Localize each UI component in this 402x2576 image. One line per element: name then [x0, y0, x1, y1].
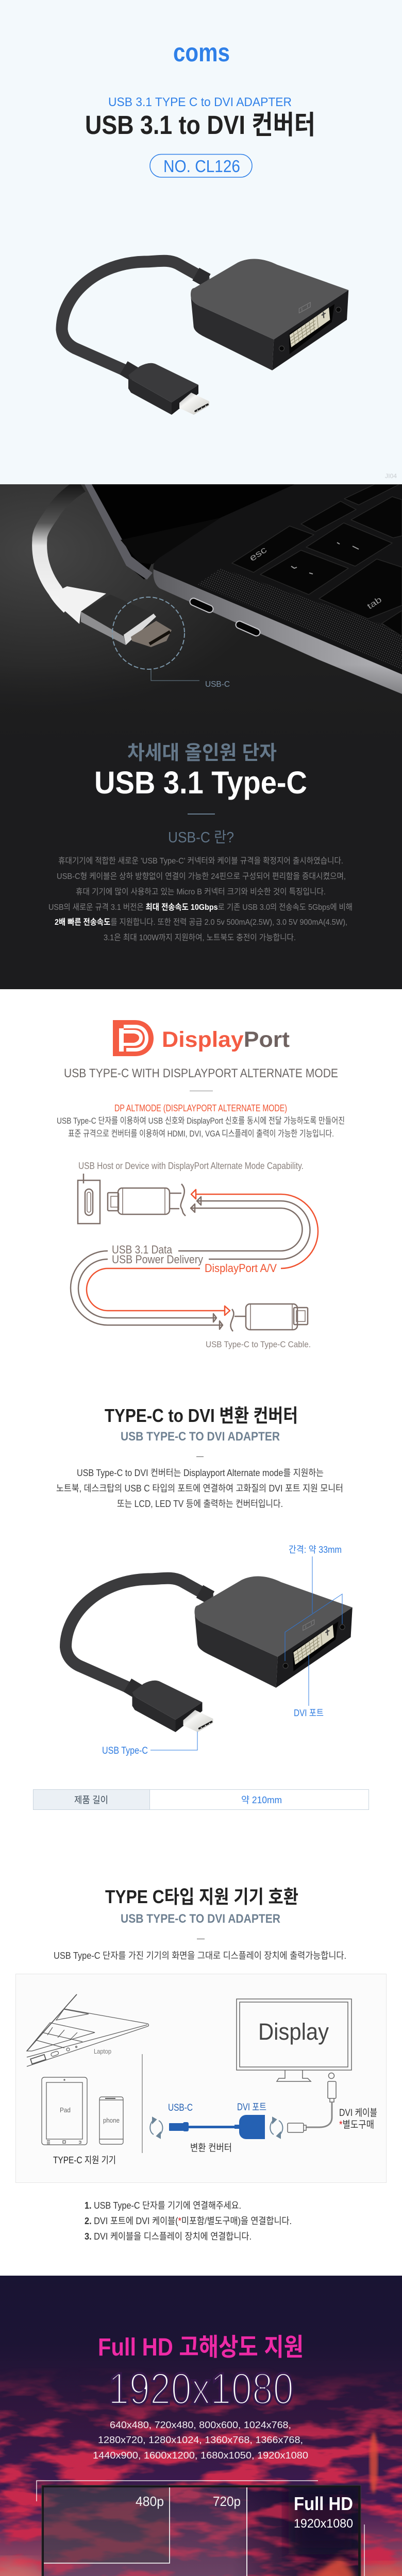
label: 1920x1080: 1920x1080	[294, 2517, 353, 2531]
heading: Full HD: Full HD 고해상도 지원	[98, 2334, 304, 2361]
icon: phone	[99, 2097, 123, 2144]
text block: converter description	[56, 1468, 343, 1509]
icon: connect arrows left	[150, 2117, 163, 2138]
text block: supported resolutions: 1280x720, 1280x1024, 1360x768, 1366x768,	[98, 2435, 303, 2445]
icon: blue converter	[169, 2115, 265, 2139]
label: Type-C devices: TYPE-C 지원 기기	[53, 2155, 116, 2165]
subheading: adapter: USB TYPE-C TO DVI ADAPTER	[121, 1430, 280, 1444]
hero subtitle: USB 3.1 TYPE C to DVI ADAPTER	[108, 95, 292, 109]
photo: laptop and USB-C cable	[0, 484, 402, 694]
text block: converter description: 또는 LCD, LED TV 등에 출력하는 컨버터입니다.	[117, 1499, 283, 1509]
text block: USB-C description: 2배 빠른 전송속도를 지원합니다. 또한 전력 공급 2.0 5v 500mA(2.5W), 3.0 5V 900mA(4.5W),	[55, 918, 347, 927]
text block: connection steps: 1. USB Type-C 단자를 기기에 연결해주세요.	[85, 2200, 241, 2211]
key labels: tab	[365, 595, 383, 611]
panel: connection diagram: Pad	[60, 2106, 71, 2114]
label: USB-C: USB-C	[205, 680, 230, 689]
panel: dark USB Type-C section	[0, 484, 402, 989]
hero title: USB 3.1 to DVI 컨버터	[85, 110, 315, 140]
subheading: DP Altmode: DP ALTMODE (DISPLAYPORT ALTERNATE MODE)	[114, 1103, 287, 1113]
label: DVI cable sold separately: DVI 케이블	[339, 2107, 377, 2119]
heading: Type C device compatibility: TYPE C타입 지원 기기 호환	[105, 1886, 298, 1907]
icon: display monitor	[237, 1999, 351, 2081]
text block: supported resolutions	[93, 2420, 308, 2461]
text block: connection steps: 2. DVI 포트에 DVI 케이블(*미포함/별도구매)을 연결합니다.	[85, 2216, 292, 2226]
callout: spacing 33mm: 간격: 약 33mm	[289, 1545, 342, 1555]
subheading: adapter: USB TYPE-C TO DVI ADAPTER	[121, 1912, 280, 1926]
label: DVI cable sold separately	[339, 2107, 377, 2130]
label: Full HD: Full HD	[294, 2493, 353, 2514]
text block: converter description: 노트북, 데스크탑의 USB C 타입의 포트에 연결하여 고화질의 DVI 포트 지원 모니터	[56, 1483, 343, 1494]
icon: laptop	[27, 1994, 148, 2066]
label: 720p: 720p	[213, 2494, 241, 2509]
table: product length	[33, 1790, 369, 1809]
text block: USB-C description: 휴대 기기에 많이 사용하고 있는 Micro B 커넥터 크기와 비슷한 것이 특징입니다.	[76, 887, 326, 896]
label: converter: 변환 컨버터	[190, 2142, 232, 2154]
key labels: esc	[247, 545, 269, 564]
text block: USB-C description: 휴대기기에 적합한 새로운 'USB Type-C' 커넥터와 케이블 규격을 확정지어 출시하였습니다.	[58, 856, 343, 866]
text block: supported resolutions: 1440x900, 1600x1200, 1680x1050, 1920x1080	[93, 2450, 308, 2461]
text block: DP Altmode description	[57, 1116, 345, 1139]
callout ring: USB-C port	[112, 597, 185, 669]
monitor	[42, 2485, 361, 2576]
model number pill	[150, 155, 252, 177]
text block: converter description: USB Type-C to DVI 컨버터는 Displayport Alternate mode를 지원하는	[77, 1468, 324, 1478]
subheading: what is USB-C: USB-C 란?	[168, 829, 234, 846]
diagram: DisplayPort alternate mode cable	[71, 1161, 318, 1349]
label: DVI port: DVI 포트	[237, 2102, 266, 2113]
text block: DP Altmode description: 표준 규격으로 컨버터를 이용하여 HDMI, DVI, VGA 디스플레이 출력이 가능한 기능입니다.	[68, 1129, 334, 1139]
icon: connect arrows right	[270, 2117, 282, 2138]
icon: display monitor: Display	[258, 2019, 329, 2045]
diagram: DisplayPort alternate mode cable: USB Power Delivery	[112, 1253, 203, 1266]
heading: Type-C to DVI converter: TYPE-C to DVI 변환 컨버터	[105, 1405, 298, 1426]
heading: 1920x1080: 1920x1080	[108, 2364, 294, 2414]
diagram: DisplayPort alternate mode cable: USB Host or Device with DisplayPort Alternate Mode Capability.	[78, 1161, 304, 1171]
logo: coms: coms	[173, 38, 230, 67]
icon: DVI cable	[288, 2073, 336, 2132]
logo: DisplayPort wordmark: DisplayPort	[162, 1027, 290, 1052]
text block: compatibility description: USB Type-C 단자를 가진 기기의 화면을 그대로 디스플레이 장치에 출력가능합니다.	[54, 1951, 346, 1961]
diagram: DisplayPort alternate mode cable: USB 3.1 Data	[112, 1243, 173, 1256]
heading: USB 3.1 Type-C: USB 3.1 Type-C	[94, 765, 307, 800]
text block: USB-C description: 3.1은 최대 100W까지 지원하여, 노트북도 충전이 가능합니다.	[104, 933, 296, 942]
panel: connection diagram: Laptop	[94, 2047, 111, 2055]
text block: supported resolutions: 640x480, 720x480, 800x600, 1024x768,	[110, 2420, 291, 2430]
model number pill: NO. CL126	[163, 157, 240, 176]
label: 480p: 480p	[136, 2494, 164, 2509]
heading: USB Type-C with DisplayPort: USB TYPE-C WITH DISPLAYPORT ALTERNATE MODE	[64, 1066, 338, 1080]
panel: DisplayPort section	[0, 989, 402, 2276]
panel: connection diagram: phone	[103, 2116, 120, 2124]
text block: DP Altmode description: USB Type-C 단자를 이용하여 USB 신호와 DisplayPort 신호를 동시에 전달 가능하도록 만들어진	[57, 1116, 345, 1126]
label: DVI cable sold separately: *별도구매	[339, 2119, 374, 2130]
callout: USB Type-C: USB Type-C	[102, 1745, 148, 1756]
text block: USB-C description	[48, 856, 353, 942]
text block: connection steps	[85, 2200, 292, 2242]
text block: USB-C description: USB-C형 케이블은 상하 방향없이 연결이 가능한 24핀으로 구성되어 편리함을 증대시켰으며,	[57, 872, 346, 881]
table: product length: 약 210mm	[241, 1795, 282, 1805]
text block: connection steps: 3. DVI 케이블을 디스플레이 장치에 연결합니다.	[85, 2231, 252, 2242]
panel: hero background	[0, 0, 402, 484]
product photo with callouts	[66, 1545, 353, 1756]
table: product length: 제품 길이	[74, 1795, 108, 1805]
icon: pad	[42, 2077, 87, 2145]
panel: connection diagram	[15, 1974, 387, 2182]
background: sunset sky	[0, 2276, 402, 2576]
panel: Full HD section	[0, 2276, 402, 2576]
callout: DVI port: DVI 포트	[294, 1708, 324, 1718]
product photo: adapter with USB-C connector	[62, 259, 348, 415]
logo: DisplayPort mark	[113, 1020, 154, 1056]
heading: next generation all-in-one connector: 차세대 올인원 단자	[127, 742, 277, 764]
diagram: DisplayPort alternate mode cable: USB Type-C to Type-C Cable.	[206, 1340, 311, 1349]
image code: JI04	[385, 472, 397, 480]
diagram: DisplayPort alternate mode cable: DisplayPort A/V	[205, 1262, 277, 1275]
label: USB-C: USB-C	[168, 2103, 193, 2113]
text block: USB-C description: USB의 새로운 규격 3.1 버전은 최대 전송속도 10Gbps로 기존 USB 3.0의 전송속도 5Gbps에 비해	[48, 903, 353, 912]
key labels	[247, 543, 383, 611]
frame corners	[37, 2481, 364, 2576]
